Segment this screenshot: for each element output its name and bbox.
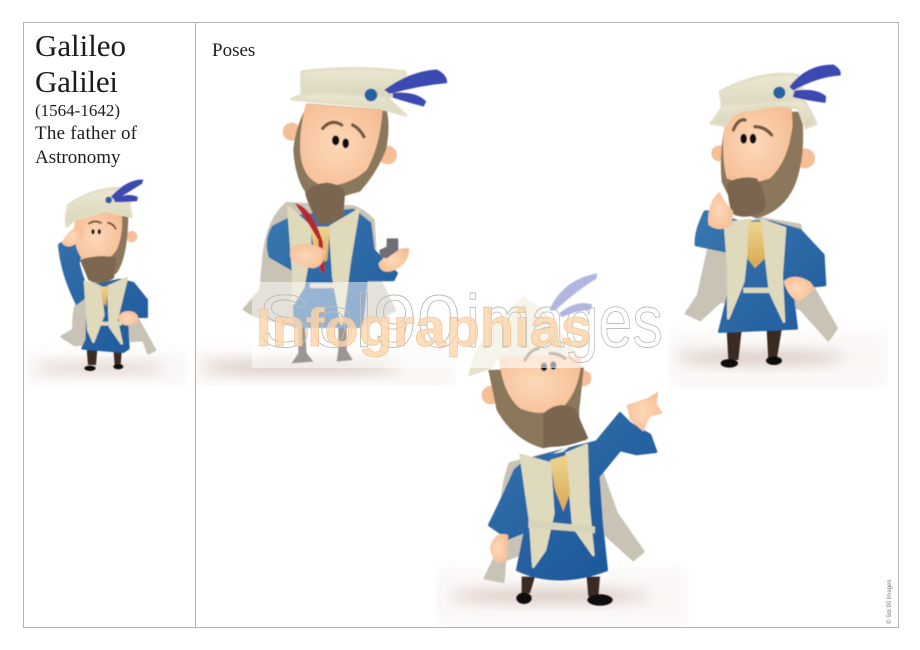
figure: Galileo holding quill and inkpot — [244, 68, 447, 363]
heading: poses: Poses — [212, 40, 255, 61]
heading: name, dates and subtitle: Galilei — [35, 64, 118, 99]
figure: Galileo pointing at the sky — [468, 274, 663, 606]
ground shadow: sidebar figure — [30, 356, 181, 380]
watermark: Sol90images and Infographics text — [256, 280, 663, 363]
image credit: © Sol 90 Images — [886, 580, 893, 624]
ground shadow: quill pose — [196, 352, 452, 384]
figure: Galileo thinking, hand on chin — [686, 65, 840, 368]
watermark: Sol90images and Infographics text: Infographias — [256, 298, 592, 358]
heading: name, dates and subtitle — [35, 28, 138, 168]
ground shadow: pointing pose — [440, 574, 682, 620]
figure: Galileo saluting, sidebar — [59, 180, 155, 371]
heading: name, dates and subtitle: Galileo — [35, 28, 126, 63]
heading: name, dates and subtitle: (1564-1642) — [35, 101, 120, 120]
watermark backing panels — [252, 268, 650, 368]
ground shadow: thinking pose — [670, 340, 881, 382]
heading: name, dates and subtitle: The father of — [35, 123, 138, 144]
watermark: Sol90images and Infographics text: Sol90 — [258, 280, 461, 363]
heading: name, dates and subtitle: Astronomy — [35, 147, 121, 168]
watermark: Sol90images and Infographics text: images — [466, 280, 663, 363]
